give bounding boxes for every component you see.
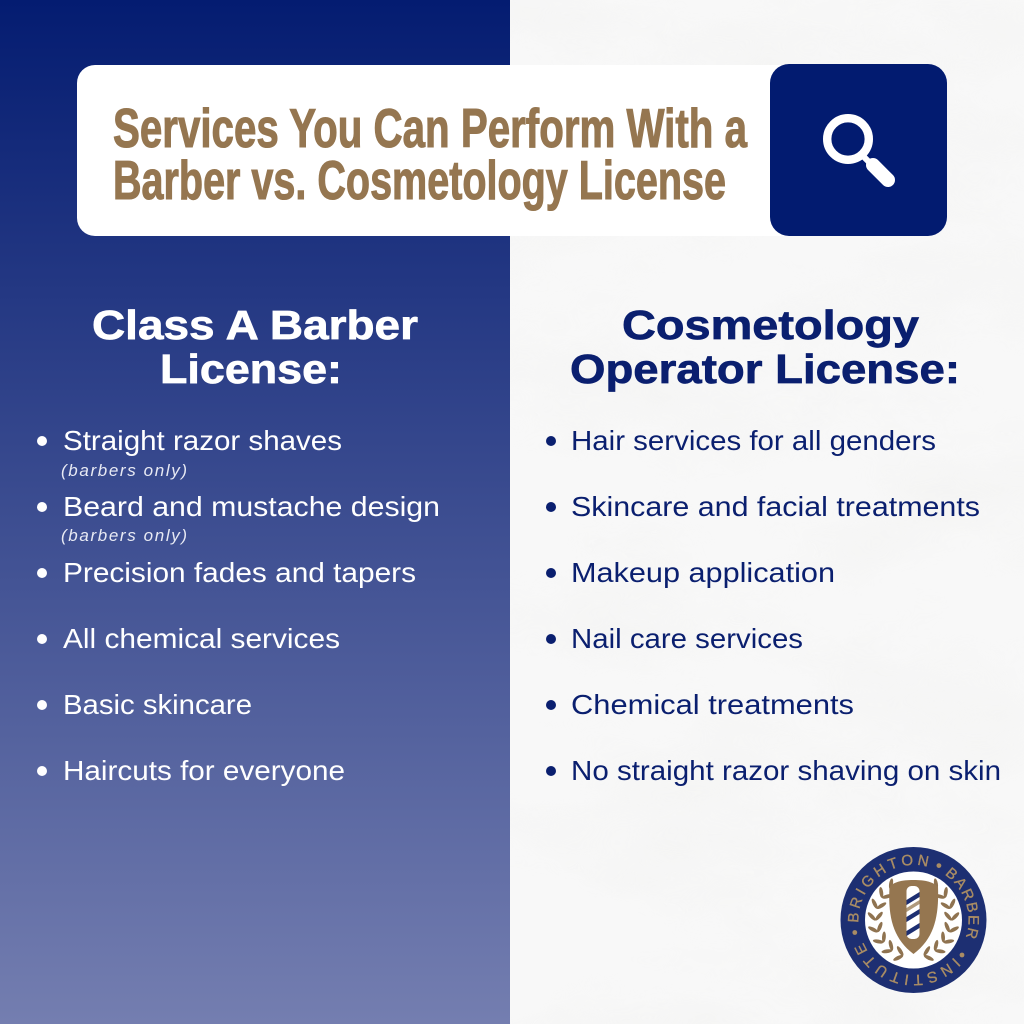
ring lettering: BARBER [945, 867, 980, 938]
list: barber services: (barbers only) [61, 526, 187, 545]
list: barber services: Precision fades and tapers [63, 557, 416, 588]
title text: Barber vs. Cosmetology License [113, 149, 726, 211]
list: cosmetology services: No straight razor shaving on skin [571, 755, 1001, 786]
heading: Class A Barber License: Class A Barber [92, 302, 418, 348]
list: barber services: Beard and mustache design [63, 491, 440, 522]
list: barber services [37, 425, 440, 786]
heading: Cosmetology Operator License: Operator License: [570, 346, 960, 392]
heading: Class A Barber License [92, 302, 418, 392]
list: cosmetology services [546, 425, 1001, 786]
ring lettering: INSTITUTE [854, 943, 960, 986]
laurel wreath [866, 876, 961, 964]
list: cosmetology services: Chemical treatments [571, 689, 854, 720]
list: barber services: Basic skincare [63, 689, 252, 720]
white title box [77, 65, 817, 236]
list: cosmetology services: Hair services for all genders [571, 425, 936, 456]
list: barber services: All chemical services [63, 623, 340, 654]
list: cosmetology services: Nail care services [571, 623, 803, 654]
heading: Cosmetology Operator License [570, 302, 960, 392]
title banner [77, 64, 947, 236]
logo: Brighton Barber Institute badge [840, 847, 986, 993]
title text [113, 97, 747, 211]
barber pole [906, 886, 920, 939]
panel: left blue gradient background [0, 0, 510, 1024]
list: barber services: Straight razor shaves [63, 425, 342, 456]
list: cosmetology services: Makeup application [571, 557, 835, 588]
ring lettering [848, 854, 980, 986]
shield [889, 880, 938, 954]
ring lettering: BRIGHTON [848, 854, 929, 922]
list: barber services: (barbers only) [61, 461, 187, 480]
title text: Services You Can Perform With a [113, 97, 747, 159]
panel: right marble background [510, 0, 1024, 1024]
heading: Class A Barber License: License: [160, 346, 342, 392]
list: cosmetology services: Skincare and facial treatments [571, 491, 980, 522]
icon box with magnifying glass [770, 64, 947, 236]
heading: Cosmetology Operator License: Cosmetology [622, 302, 919, 348]
list: barber services: Haircuts for everyone [63, 755, 345, 786]
